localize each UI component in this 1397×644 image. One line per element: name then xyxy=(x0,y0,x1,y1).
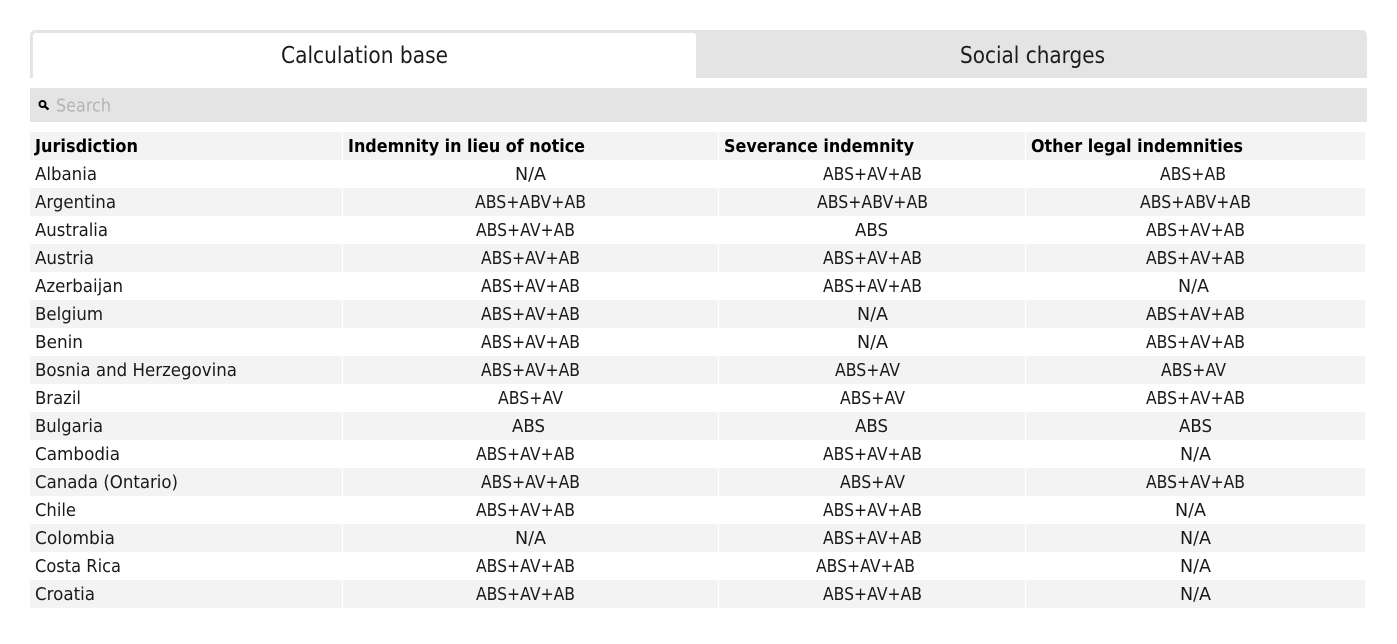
row: Argentina: Argentina xyxy=(35,192,116,213)
active tab: Calculation base xyxy=(33,33,696,78)
row: Canada (Ontario): Canada (Ontario) xyxy=(35,472,178,493)
table header row: Indemnity in lieu of notice xyxy=(348,137,585,157)
row: Benin xyxy=(35,332,1245,353)
table header row xyxy=(30,132,1365,160)
row: Cambodia: ABS+AV+AB xyxy=(823,444,922,465)
row: Argentina: ABS+ABV+AB xyxy=(1140,192,1251,213)
row: Colombia xyxy=(30,524,1365,552)
row: Australia xyxy=(35,220,1245,241)
row: Colombia: N/A xyxy=(515,528,547,549)
table header row: Other legal indemnities xyxy=(1031,137,1243,157)
row: Croatia: ABS+AV+AB xyxy=(476,584,575,605)
row: Benin: Benin xyxy=(35,332,83,353)
row: Austria: ABS+AV+AB xyxy=(823,248,922,269)
row: Bulgaria: ABS xyxy=(855,416,888,437)
row: Costa Rica: N/A xyxy=(1180,556,1212,577)
row: Australia: ABS+AV+AB xyxy=(1146,220,1245,241)
row: Costa Rica: Costa Rica xyxy=(35,556,121,577)
row: Colombia: Colombia xyxy=(35,528,115,549)
row: Albania xyxy=(35,164,1226,185)
row: Brazil: ABS+AV xyxy=(840,388,906,409)
row: Argentina: ABS+ABV+AB xyxy=(475,192,586,213)
row: Costa Rica: ABS+AV+AB xyxy=(816,556,915,577)
row: Azerbaijan: Azerbaijan xyxy=(35,276,123,297)
row: Australia: ABS+AV+AB xyxy=(476,220,575,241)
row: Austria xyxy=(30,244,1365,272)
row: Chile: Chile xyxy=(35,500,76,521)
row: Canada (Ontario) xyxy=(30,468,1365,496)
row: Croatia xyxy=(30,580,1365,608)
table header row: Jurisdiction xyxy=(34,137,138,157)
row: Cambodia: Cambodia xyxy=(35,444,120,465)
row: Bosnia and Herzegovina: ABS+AV xyxy=(835,360,901,381)
row: Austria: ABS+AV+AB xyxy=(1146,248,1245,269)
row: Austria: Austria xyxy=(35,248,94,269)
row: Argentina xyxy=(30,188,1365,216)
row: Bulgaria xyxy=(30,412,1365,440)
row: Cambodia xyxy=(35,444,1212,465)
row: Bulgaria: ABS xyxy=(512,416,545,437)
row: Colombia: ABS+AV+AB xyxy=(823,528,922,549)
row: Brazil xyxy=(35,388,1245,409)
tab bar xyxy=(30,30,1367,78)
row: Argentina: ABS+ABV+AB xyxy=(817,192,928,213)
row: Benin: N/A xyxy=(857,332,889,353)
row: Belgium: Belgium xyxy=(35,304,103,325)
row: Albania: ABS+AB xyxy=(1160,164,1226,185)
row: Colombia: N/A xyxy=(1180,528,1212,549)
row: Albania: Albania xyxy=(35,164,97,185)
search placeholder: Search xyxy=(56,96,111,116)
row: Costa Rica xyxy=(35,556,1212,577)
row: Chile xyxy=(35,500,1207,521)
row: Belgium: N/A xyxy=(857,304,889,325)
row: Brazil: Brazil xyxy=(35,388,81,409)
row: Benin: ABS+AV+AB xyxy=(1146,332,1245,353)
row: Bulgaria: ABS xyxy=(1179,416,1212,437)
row: Azerbaijan: ABS+AV+AB xyxy=(481,276,580,297)
row: Albania: N/A xyxy=(515,164,547,185)
row: Albania: ABS+AV+AB xyxy=(823,164,922,185)
row: Bosnia and Herzegovina: ABS+AV+AB xyxy=(481,360,580,381)
row: Austria: ABS+AV+AB xyxy=(481,248,580,269)
inactive tab: Social charges: Social charges xyxy=(960,43,1105,69)
row: Azerbaijan: N/A xyxy=(1178,276,1210,297)
row: Benin: ABS+AV+AB xyxy=(481,332,580,353)
row: Croatia: N/A xyxy=(1180,584,1212,605)
row: Brazil: ABS+AV+AB xyxy=(1146,388,1245,409)
row: Bulgaria: Bulgaria xyxy=(35,416,103,437)
icon: magnifying glass xyxy=(40,101,48,110)
active tab: Calculation base: Calculation base xyxy=(281,43,448,69)
row: Azerbaijan: ABS+AV+AB xyxy=(823,276,922,297)
row: Azerbaijan xyxy=(35,276,1210,297)
row: Croatia: Croatia xyxy=(35,584,95,605)
row: Canada (Ontario): ABS+AV xyxy=(840,472,906,493)
row: Canada (Ontario): ABS+AV+AB xyxy=(1146,472,1245,493)
table header row: Severance indemnity xyxy=(724,137,915,157)
row: Bosnia and Herzegovina xyxy=(30,356,1365,384)
row: Costa Rica: ABS+AV+AB xyxy=(476,556,575,577)
row: Belgium: ABS+AV+AB xyxy=(481,304,580,325)
row: Canada (Ontario): ABS+AV+AB xyxy=(481,472,580,493)
row: Chile: ABS+AV+AB xyxy=(823,500,922,521)
row: Croatia: ABS+AV+AB xyxy=(823,584,922,605)
row: Cambodia: N/A xyxy=(1180,444,1212,465)
row: Chile: ABS+AV+AB xyxy=(476,500,575,521)
row: Bosnia and Herzegovina: ABS+AV xyxy=(1161,360,1227,381)
search bar xyxy=(30,88,1367,122)
row: Chile: N/A xyxy=(1175,500,1207,521)
row: Belgium: ABS+AV+AB xyxy=(1146,304,1245,325)
row: Cambodia: ABS+AV+AB xyxy=(476,444,575,465)
row: Australia: Australia xyxy=(35,220,108,241)
row: Australia: ABS xyxy=(855,220,888,241)
table xyxy=(30,132,1365,608)
row: Belgium xyxy=(30,300,1365,328)
row: Bosnia and Herzegovina: Bosnia and Herzegovina xyxy=(35,360,237,381)
row: Brazil: ABS+AV xyxy=(498,388,564,409)
